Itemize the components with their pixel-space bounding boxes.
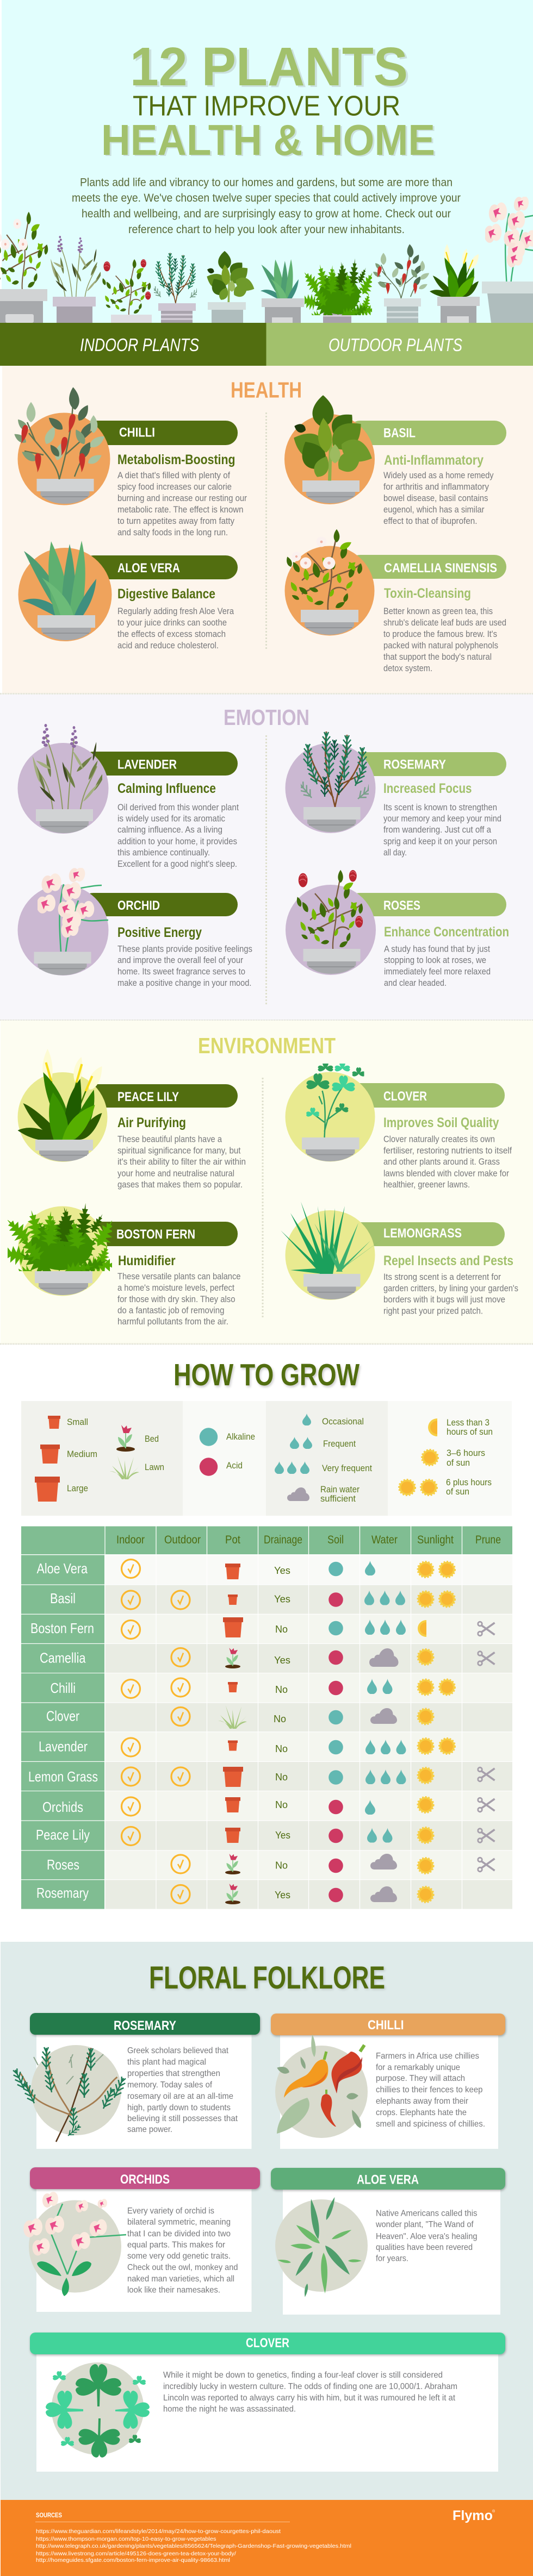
folklore text: chilli [376, 2052, 485, 2129]
card: clover: fertiliser, restoring nutrients to itself [383, 1146, 512, 1155]
folklore text: clover [163, 2371, 457, 2414]
source links: https://www.theguardian.com/lifeandstyle/2014/may/24/how-to-grow-courgettes-phil-daoust [36, 2528, 281, 2535]
plant: orchid [36, 866, 108, 952]
card: clover: lawns blended with clover make for [383, 1168, 509, 1178]
panel: floral folklore [1, 1942, 533, 2500]
card: roses: stopping to look at roses, we [384, 955, 486, 965]
table row labels: Peace Lily [36, 1827, 90, 1843]
card: rosemary: Its scent is known to strengthen [383, 803, 497, 812]
card: aloe vera: Digestive Balance [117, 586, 215, 602]
potted chilli [372, 244, 431, 323]
potted lavender [49, 236, 105, 323]
card: clover: Clover naturally creates its own [383, 1135, 495, 1145]
card: rosemary [285, 731, 506, 858]
card: basil: for arthritis and inflammatory [383, 482, 489, 492]
folklore text: orchids: bilateral symmetric, meaning [127, 2217, 231, 2227]
card: lemongrass: garden critters, by lining your garden's [383, 1284, 518, 1293]
card: peace lily: These beautiful plants have a [117, 1135, 222, 1145]
card: aloe vera: to your juice drinks can soothe [117, 618, 227, 628]
folklore text: clover: Lincoln was reported to always carry his with him, but it was rumoured he left it at [163, 2393, 456, 2403]
banner: outdoor plants: OUTDOOR PLANTS [329, 335, 462, 355]
card: camellia sinensis: that support the body's natural [383, 652, 492, 662]
footer panel [1, 2500, 533, 2576]
table row labels: Basil [50, 1590, 76, 1606]
card: orchid: and improve the overall feel of your [117, 955, 243, 965]
card: clover: Improves Soil Quality [383, 1115, 499, 1130]
illustration: rosemary branch [11, 2047, 128, 2142]
folklore text: orchids: that I can be divided into two [127, 2229, 231, 2239]
legend: soil: Acid [226, 1461, 243, 1471]
legend: watering: Frequent [323, 1439, 356, 1449]
drainage values: Yes [274, 1565, 290, 1576]
card: orchid: ORCHID [117, 898, 160, 913]
folklore card: aloe vera: ALOE VERA [357, 2173, 419, 2187]
folklore text: chilli: elephants away from their [376, 2097, 469, 2106]
card: lemongrass: LEMONGRASS [383, 1226, 462, 1241]
potted rosemary [150, 253, 202, 323]
card: clover: CLOVER [383, 1089, 427, 1104]
panel: health [0, 366, 533, 693]
folklore text: clover: home the night he was assassinated. [163, 2404, 296, 2414]
title: 12 plants that improve your health and home: THAT IMPROVE YOUR [133, 90, 400, 122]
folklore text: orchids: look like their namesakes. [127, 2286, 220, 2294]
table header row: Water [371, 1534, 398, 1546]
plant: aloe [22, 541, 96, 615]
card: aloe vera: the effects of excess stomach [117, 629, 226, 639]
illustration: aloe leaves [277, 2196, 362, 2297]
card: rosemary: from wandering. Just cut off a [383, 825, 492, 835]
drainage values: No [275, 1799, 288, 1810]
table header row: Drainage [264, 1534, 302, 1546]
folklore text: chilli: chillies to their fences to keep [376, 2085, 483, 2094]
card: lavender [17, 724, 239, 869]
title: 12 plants that improve your health and home [101, 36, 435, 164]
potted boston fern [296, 258, 378, 328]
folklore text: rosemary: believing it still possesses that [127, 2114, 238, 2123]
card: camellia sinensis: shrub's delicate leaf buds are used [383, 618, 506, 628]
source links: https://www.livestrong.com/article/495126-does-green-tea-detox-your-body/ [36, 2550, 236, 2557]
legend: pot sizes [35, 1416, 164, 1502]
growing guide table [21, 1526, 512, 1909]
heading: health: HEALTH [231, 377, 302, 402]
card: lavender: Excellent for a good night's sleep. [117, 859, 237, 869]
plant: lemongrass [281, 1202, 382, 1274]
legend: soil: Alkaline [226, 1432, 255, 1442]
banner: indoor plants [0, 323, 266, 366]
table row labels: Orchids [42, 1799, 83, 1815]
legend panel [21, 1401, 512, 1516]
soil circles [329, 1562, 343, 1902]
card: camellia sinensis: Toxin-Cleansing [384, 586, 471, 601]
card: peace lily: Air Purifying [117, 1115, 186, 1130]
folklore card: rosemary [11, 2013, 260, 2149]
banner: indoor plants: INDOOR PLANTS [80, 335, 199, 355]
plant: basil [289, 395, 376, 480]
intro paragraph: meets the eye. We've chosen twelve super species that could actively improve your [72, 192, 461, 204]
legend: pot sizes: Small [67, 1417, 88, 1427]
legend: sunlight: hours of sun [447, 1427, 493, 1437]
card: basil [284, 395, 506, 526]
table header row: Soil [327, 1534, 344, 1546]
folklore text: rosemary: properties that strengthen [127, 2069, 220, 2078]
illustration: clover leaves [46, 2364, 150, 2458]
card: roses: Enhance Concentration [384, 924, 509, 940]
folklore text: rosemary: this plant had magical [127, 2058, 206, 2067]
card: rosemary: sprig and keep it on your person [383, 837, 497, 847]
table row labels: Boston Fern [30, 1620, 94, 1636]
card: lavender: is widely used for its aromatic [117, 814, 225, 824]
card: chilli: Metabolism-Boosting [117, 452, 235, 467]
card: boston fern: These versatile plants can balance [117, 1272, 240, 1281]
card: peace lily [17, 1049, 246, 1190]
card: clover: healthier, greener lawns. [383, 1180, 470, 1190]
card: orchid [17, 866, 252, 988]
table row labels: Clover [46, 1708, 79, 1724]
illustration: chillies and leaves [276, 2034, 364, 2134]
card: clover [285, 1061, 512, 1190]
card: camellia sinensis: Better known as green tea, this [383, 607, 493, 616]
folklore text: rosemary: same power. [127, 2125, 172, 2134]
folklore text: clover: incredibly lucky in western culture. The odds of finding one are 10,000/1. Abraham [163, 2382, 457, 2391]
folklore text: orchids [127, 2206, 238, 2294]
folklore text: orchids: equal parts. This makes for [127, 2240, 226, 2250]
panel: emotion [0, 695, 533, 1020]
card: roses: A study has found that by just [384, 945, 490, 954]
card: aloe vera [18, 541, 238, 651]
table header row: Prune [475, 1534, 501, 1546]
card: lavender: Calming Influence [117, 781, 216, 796]
folklore text: rosemary: rosemary oil are at an all-time [127, 2092, 233, 2101]
folklore card: chilli: CHILLI [368, 2018, 404, 2033]
folklore text: aloe vera: for years. [376, 2254, 408, 2263]
card: lavender: Oil derived from this wonder plant [117, 803, 239, 812]
card: camellia sinensis: packed with natural polyphenols [383, 641, 498, 651]
folklore card: chilli [271, 2014, 505, 2149]
card: basil: Widely used as a home remedy [383, 471, 494, 480]
potted orchid [482, 195, 533, 323]
legend: watering: Occasional [322, 1417, 364, 1427]
plant: boston fern [0, 1202, 121, 1286]
folklore text: aloe vera: qualities have been revered [376, 2243, 473, 2252]
drainage values: No [275, 1860, 288, 1871]
card: peace lily: gases that makes them so popular. [117, 1180, 243, 1190]
folklore text: chilli: for a remarkably unique [376, 2063, 460, 2072]
card: rosemary: Increased Focus [383, 781, 472, 796]
legend: sunlight: Less than 3 [447, 1418, 489, 1428]
card: lavender: this ambience continually. [117, 848, 210, 858]
card: chilli: spicy food increases our calorie [117, 482, 232, 492]
card: boston fern: do a fantastic job of removing [117, 1305, 224, 1315]
card: camellia sinensis: detox system. [383, 664, 432, 673]
legend: sunlight: of sun [446, 1487, 469, 1497]
card: peace lily: it's their ability to filter the air within [117, 1157, 246, 1167]
folklore text: aloe vera: Native Americans called this [376, 2209, 478, 2218]
table row labels: Camellia [40, 1650, 86, 1666]
legend: watering: Very frequent [322, 1464, 372, 1473]
folklore text: clover: While it might be down to genetics, finding a four-leaf clover is still considered [163, 2371, 443, 2380]
title: 12 plants that improve your health and home: 12 PLANTS [130, 36, 408, 97]
card: aloe vera: ALOE VERA [117, 561, 180, 576]
drainage values: Yes [275, 1830, 290, 1841]
plant: roses [295, 870, 364, 949]
row of potted plants [0, 195, 533, 328]
table row labels: Roses [47, 1856, 79, 1873]
intro paragraph: Plants add life and vibrancy to our homes and gardens, but some are more than [80, 176, 453, 189]
table header row: Outdoor [164, 1534, 201, 1546]
card: rosemary: ROSEMARY [383, 758, 446, 772]
legend: pot sizes: Large [67, 1484, 88, 1493]
source links: http://www.telegraph.co.uk/gardening/plants/vegetables/8565624/Telegraph-Gardenshop-Fast-growing-vegetables.html [36, 2543, 351, 2549]
water icons [364, 1561, 406, 1902]
folklore text: chilli: crops. Elephants hate the [376, 2108, 467, 2117]
folklore text: rosemary: memory. Today sales of [127, 2080, 213, 2090]
legend: pot sizes: Lawn [145, 1462, 164, 1472]
plant: camellia [285, 529, 363, 610]
drainage values: Yes [274, 1655, 290, 1666]
card: chilli: and salty foods in the long run. [117, 528, 228, 537]
card: aloe vera: Regularly adding fresh Aloe Vera [117, 607, 234, 616]
card: roses: and clear headed. [384, 978, 447, 988]
drainage values: No [275, 1684, 288, 1695]
card: peace lily: PEACE LILY [117, 1090, 179, 1104]
card: basil: bowel disease, basil contains [383, 493, 488, 503]
drainage values: No [275, 1772, 288, 1783]
legend: watering: sufficient [320, 1494, 356, 1504]
folklore card: rosemary: ROSEMARY [114, 2018, 176, 2033]
legend: sunlight: of sun [447, 1458, 470, 1468]
card: orchid: These plants provide positive feelings [117, 945, 252, 954]
folklore card: clover [30, 2333, 505, 2472]
card: rosemary: your memory and keep your mind [383, 814, 501, 824]
folklore card: orchids [23, 2167, 260, 2312]
legend: pot sizes: Bed [145, 1434, 159, 1444]
card: chilli: to turn appetites away from fatty [117, 516, 235, 526]
card: lemongrass: borders with it bugs will just move [383, 1295, 505, 1304]
intro paragraph [72, 176, 461, 236]
folklore text: chilli: purpose. They will attach [376, 2074, 465, 2083]
card: basil: Anti-Inflammatory [384, 453, 484, 468]
folklore text: orchids: Check out the owl, monkey and [127, 2263, 238, 2272]
intro panel background [2, 0, 533, 323]
table header row [21, 1526, 512, 1554]
table row labels: Aloe Vera [37, 1560, 88, 1577]
panel: environment [0, 1021, 533, 1344]
table row labels: Lavender [39, 1738, 88, 1754]
card: camellia sinensis: CAMELLIA SINENSIS [384, 561, 497, 576]
card: peace lily: your home and neutralise natural [117, 1168, 234, 1178]
folklore text: aloe vera: Heaven". Aloe vera's healing [376, 2232, 478, 2241]
card: chilli: metabolic rate. The effect is known [117, 505, 244, 515]
card: basil: effect to that of ibuprofen. [383, 516, 478, 526]
heading: how to grow: HOW TO GROW [173, 1358, 360, 1392]
card: orchid: Positive Energy [117, 925, 202, 940]
legend: sunlight [399, 1418, 493, 1497]
card: lavender: LAVENDER [117, 758, 177, 772]
drainage values: No [275, 1743, 288, 1754]
intro paragraph: reference chart to help you look after your new inhabitants. [128, 223, 405, 236]
card: basil: eugenol, which has a similar [383, 505, 485, 515]
card: boston fern: a home's moisture levels, perfect [117, 1283, 234, 1293]
pruning scissors [478, 1622, 495, 1872]
card: orchid: home. Its sweet fragrance serves to [117, 967, 245, 977]
legend: soil [200, 1428, 255, 1476]
card: chilli [13, 387, 247, 537]
table row labels: Chilli [50, 1680, 76, 1696]
card: boston fern [0, 1202, 240, 1327]
card: boston fern: harmful pollutants from the air. [117, 1317, 228, 1327]
card: basil: BASIL [383, 426, 416, 440]
card: boston fern: for those with dry skin. They also [117, 1295, 235, 1304]
table header row: Sunlight [417, 1534, 454, 1546]
card: rosemary: all day. [383, 848, 407, 858]
table row labels [28, 1560, 98, 1901]
card: lavender: addition to your home, it provides [117, 837, 237, 847]
sunlight icons [418, 1561, 455, 1903]
card: lemongrass: right past your prized patch. [383, 1306, 483, 1316]
illustration: orchid with leaves [23, 2192, 126, 2296]
legend: watering: Rain water [320, 1485, 360, 1495]
table row labels: Lemon Grass [28, 1768, 98, 1785]
card: chilli: burning and increase our resting our [117, 493, 247, 503]
folklore card: orchids: ORCHIDS [120, 2172, 170, 2187]
plant: chilli [13, 387, 107, 479]
drainage values: No [274, 1714, 286, 1724]
plant: lavender [32, 724, 109, 809]
folklore text: aloe vera [375, 2209, 478, 2263]
card: lemongrass [281, 1202, 518, 1316]
potted basil [204, 251, 257, 323]
drainage values [274, 1565, 290, 1900]
drainage values: Yes [274, 1593, 290, 1604]
folklore text: aloe vera: wonder plant, "The Wand of [375, 2220, 474, 2229]
folklore text: rosemary: high, partly down to students [127, 2103, 231, 2112]
flymo logo: Flymo [453, 2508, 493, 2523]
heading: environment: ENVIRONMENT [198, 1033, 336, 1058]
heading: floral folklore: FLORAL FOLKLORE [149, 1960, 385, 1996]
intro paragraph: health and wellbeing, and are surprisingly easy to grow at home. Check out our [82, 208, 451, 220]
card: chilli: A diet that's filled with plenty of [117, 471, 230, 480]
card: aloe vera: acid and reduce cholesterol. [117, 641, 219, 651]
card: boston fern: Humidifier [118, 1253, 176, 1268]
plant: rosemary [294, 731, 378, 807]
heading: emotion: EMOTION [224, 705, 309, 730]
table header row: Indoor [116, 1534, 145, 1546]
indoor and outdoor check marks [122, 1560, 190, 1903]
source links: https://www.thompson-morgan.com/top-10-easy-to-grow-vegetables [36, 2536, 216, 2542]
source links: http://homeguides.sfgate.com/boston-fern-improve-air-quality-98663.html [36, 2557, 230, 2564]
plant: clover [306, 1061, 365, 1137]
folklore text: orchids: Every variety of orchid is [127, 2206, 214, 2216]
drainage values: Yes [275, 1890, 290, 1900]
card: orchid: make a positive change in your mood. [117, 978, 251, 988]
card: roses: ROSES [383, 898, 420, 913]
folklore text: orchids: some very odd genetic traits. [127, 2252, 231, 2261]
legend: watering [275, 1414, 372, 1504]
table header row: Pot [225, 1534, 240, 1546]
legend: pot sizes: Medium [67, 1449, 97, 1459]
legend: sunlight: 3–6 hours [447, 1448, 485, 1458]
folklore card: aloe vera [271, 2168, 505, 2315]
card: peace lily: spiritual significance for many, but [117, 1146, 241, 1155]
potted camellia [0, 212, 49, 323]
title: 12 plants that improve your health and home: HEALTH & HOME [101, 116, 435, 164]
folklore text: chilli: Farmers in Africa use chillies [376, 2052, 479, 2061]
card: boston fern: BOSTON FERN [116, 1227, 195, 1242]
card: camellia sinensis: to produce the famous brew. It's [383, 629, 497, 639]
folklore text: chilli: smell and spiciness of chillies. [376, 2119, 485, 2129]
potted aloe [261, 259, 304, 323]
sources heading: SOURCES [36, 2511, 62, 2519]
plant: peace lily [17, 1049, 102, 1141]
card: roses [286, 870, 509, 988]
folklore text: rosemary: Greek scholars believed that [127, 2046, 229, 2055]
table row labels: Rosemary [36, 1885, 89, 1901]
folklore text: rosemary [127, 2046, 238, 2134]
card: lemongrass: Its strong scent is a deterrent for [383, 1272, 501, 1282]
card: clover: and other plants around it. Grass [383, 1157, 500, 1167]
folklore text: orchids: naked man varieties, which all [127, 2274, 234, 2284]
flymo logo: ® [492, 2509, 495, 2514]
banner: outdoor plants [266, 323, 533, 366]
card: lavender: calming influence. As a living [117, 825, 222, 835]
card: chilli: CHILLI [119, 425, 155, 440]
potted peace lily [430, 244, 480, 323]
folklore card: clover: CLOVER [246, 2336, 289, 2350]
potted roses [101, 259, 152, 323]
pot size icons [218, 1564, 247, 1904]
card: roses: immediately feel more relaxed [384, 967, 491, 977]
card: camellia sinensis [285, 529, 506, 673]
source links [36, 2528, 351, 2564]
drainage values: No [275, 1624, 288, 1635]
legend: sunlight: 6 plus hours [446, 1478, 492, 1487]
